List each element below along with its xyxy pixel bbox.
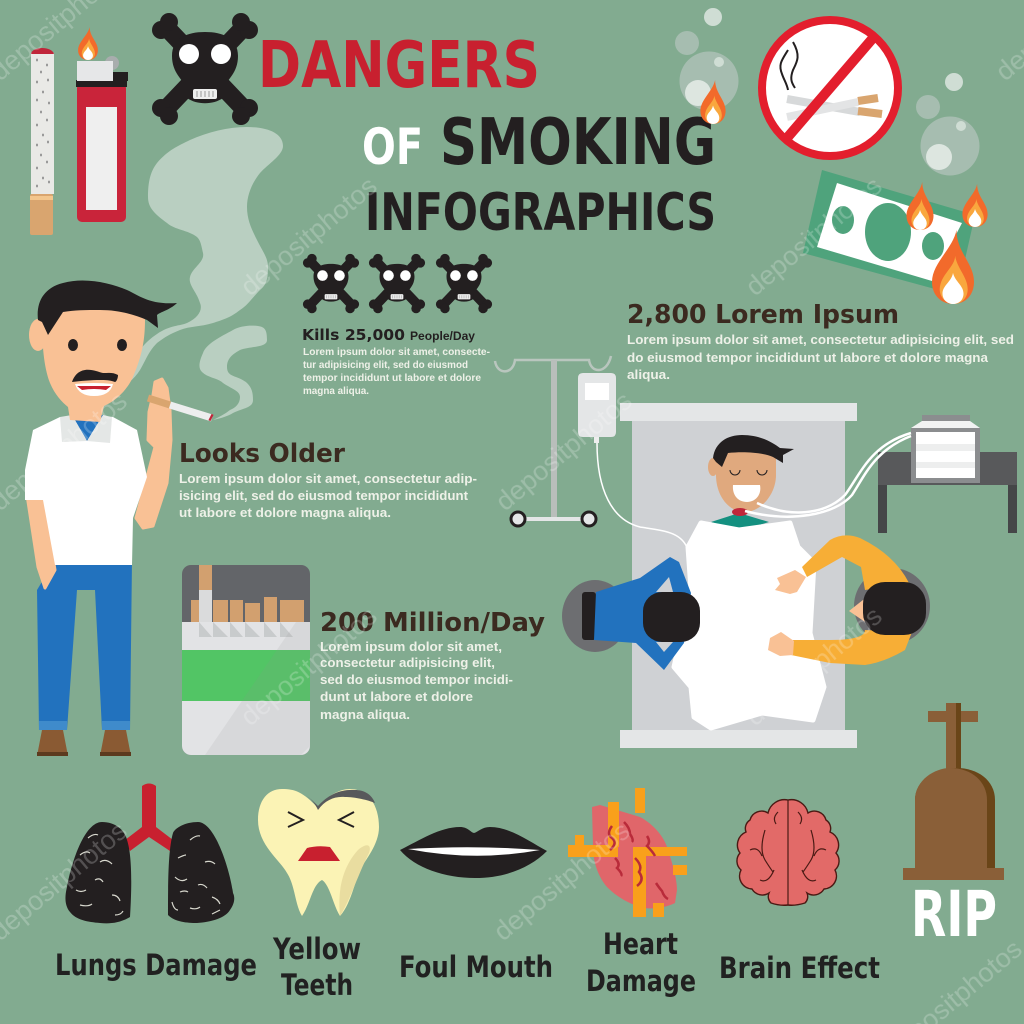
bottom labels: Damage [586, 964, 696, 998]
watermarks: depositphotos [235, 171, 383, 302]
man's collar [60, 415, 112, 443]
icon: large skull and crossbones [152, 13, 258, 125]
text block: 200 million per day: magna aliqua. [320, 707, 410, 722]
text block: 200 million per day: dunt ut labore et dolore [320, 689, 473, 704]
grave with cross [903, 703, 1004, 880]
watermarks: depositphotos [488, 816, 636, 947]
man's white shirt [25, 417, 147, 565]
bottom labels: Heart [603, 927, 678, 961]
row of three skulls [303, 254, 492, 313]
text block: looks older [179, 439, 477, 520]
title [258, 29, 716, 243]
text block: kills per day: Kills 25,000 [302, 326, 405, 344]
text block: kills per day: magna aliqua. [303, 386, 369, 397]
text block: looks older: Lorem ipsum dolor sit amet, consectetur adip- [179, 471, 477, 486]
man's legs and shoes [37, 560, 132, 756]
bottom labels: Teeth [281, 968, 353, 1002]
hospital bed [620, 403, 857, 748]
watermarks: depositphotos [740, 601, 888, 732]
icon: cigarette [30, 48, 54, 235]
text block: 200 million per day: Lorem ipsum dolor sit amet, [320, 639, 502, 654]
icon: burning money with bubbles [803, 73, 988, 304]
text block: 200 million per day: sed do eiusmod tempor incidi- [320, 672, 513, 687]
text block: 200 million per day: consectetur adipisicing elit, [320, 655, 495, 670]
bottom labels: Brain Effect [719, 951, 880, 985]
icon: foul mouth [400, 827, 547, 878]
doctor in orange [768, 535, 930, 665]
text block: kills per day: tur adipisicing elit, sed do eiusmod [303, 360, 468, 371]
decorative bubbles and flame near title [675, 8, 738, 124]
character: smoking man [25, 281, 212, 756]
text block: 200 million per day: 200 Million/Day [320, 608, 545, 638]
bottom labels: Foul Mouth [399, 950, 553, 984]
bottom labels: Lungs Damage [55, 948, 257, 982]
text block: 2,800 Lorem Ipsum: Lorem ipsum dolor sit amet, consectetur adipisicing elit, sed [627, 332, 1014, 347]
text block: looks older: ut labore et dolore magna aliqua. [179, 505, 391, 520]
text block: 2,800 Lorem Ipsum [627, 300, 1014, 382]
icon: no smoking sign [762, 20, 898, 156]
cigarette pack [182, 565, 310, 755]
text block: looks older: Looks Older [179, 439, 345, 469]
smoke plumes [120, 127, 283, 420]
man's arms [27, 379, 171, 588]
icon: damaged heart [568, 788, 687, 917]
text block: 2,800 Lorem Ipsum: aliqua. [627, 367, 670, 382]
bottom labels: Yellow [272, 932, 361, 966]
man's head [29, 281, 177, 422]
text block: 2,800 Lorem Ipsum: do eiusmod tempor incididunt ut labore et dolore magna [627, 350, 989, 365]
icon: damaged lungs [65, 784, 234, 923]
title: OF [362, 118, 423, 176]
icon: lighter [76, 27, 128, 222]
watermarks: depositphotos [490, 386, 638, 517]
text block: looks older: isicing elit, sed do eiusmod tempor incididunt [179, 488, 469, 503]
watermarks: depositphotos [235, 601, 383, 732]
text block: kills per day: tempor incididunt ut labore et dolore [303, 373, 481, 384]
doctor in blue [562, 557, 700, 670]
title: SMOKING [440, 106, 716, 180]
text block: 200 million per day [320, 608, 545, 722]
text block: 2,800 Lorem Ipsum: 2,800 Lorem Ipsum [627, 300, 899, 330]
IV tube [597, 443, 688, 550]
text block: kills per day: People/Day [410, 329, 475, 343]
patient [674, 433, 911, 728]
text block: kills per day: Lorem ipsum dolor sit amet, consecte- [303, 347, 490, 358]
text block: kills per day [302, 326, 490, 397]
watermarks: depositphotos [740, 171, 888, 302]
icon: brain [737, 800, 839, 905]
IV stand and bag [495, 356, 616, 526]
icon: yellow tooth [258, 789, 379, 916]
breathing machine on table [878, 415, 1017, 533]
title: DANGERS [258, 29, 540, 103]
title: INFOGRAPHICS [365, 183, 716, 243]
bottom labels [55, 927, 880, 1002]
man's cigarette [148, 398, 212, 418]
